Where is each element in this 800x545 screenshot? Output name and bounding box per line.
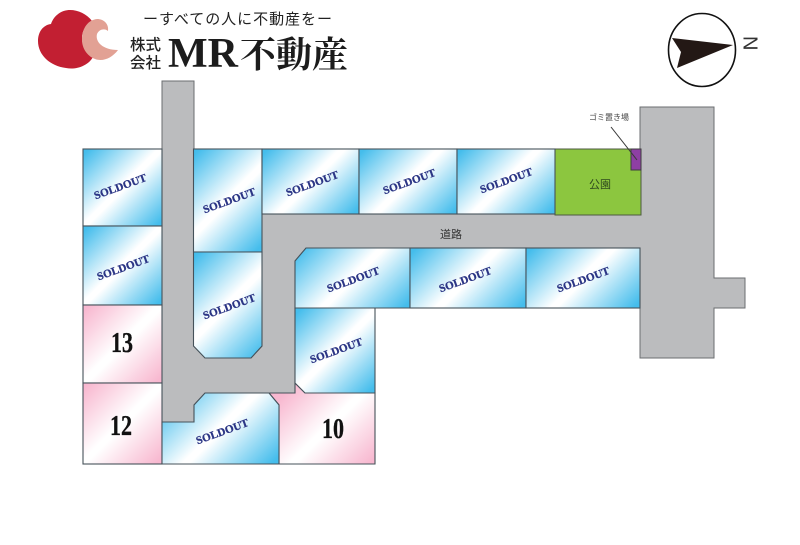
- lot: sold out, left column second: SOLDOUT: [96, 253, 152, 283]
- lot: sold out, middle row second: SOLDOUT: [438, 265, 494, 295]
- lot 12: [83, 383, 162, 464]
- lot 12: 12: [110, 411, 132, 442]
- lot: sold out, left column top: SOLDOUT: [93, 172, 149, 202]
- logo: company type: 株式: [130, 36, 162, 54]
- compass: [668, 14, 760, 86]
- lot: sold out, middle row first: SOLDOUT: [326, 265, 382, 295]
- lot: sold out, top row second: SOLDOUT: [382, 167, 438, 197]
- lot 10: 10: [322, 414, 344, 445]
- lot: sold out, tall lot beside road: [194, 149, 262, 252]
- lot: sold out, chamfered lot: SOLDOUT: [202, 292, 258, 322]
- road: [162, 81, 745, 422]
- lot: sold out, left column second: [83, 226, 162, 305]
- company logo: [38, 10, 348, 77]
- road label: 道路: [440, 227, 462, 241]
- lot: sold out, tall lot beside road: SOLDOUT: [202, 186, 258, 216]
- logo: company type: 会社: [130, 54, 162, 72]
- garbage leader line: [611, 127, 637, 160]
- lot: sold out, top row third: [457, 149, 555, 214]
- garbage area: [589, 112, 641, 170]
- lot: sold out, top row third: SOLDOUT: [479, 166, 535, 196]
- logo: company name: 不動産: [240, 35, 348, 75]
- lot: sold out, middle row first: [295, 248, 410, 308]
- lot: sold out, middle row third: [526, 248, 640, 308]
- lot: sold out, bottom: SOLDOUT: [195, 417, 251, 447]
- park label: 公園: [589, 178, 611, 191]
- lot: sold out, middle row second: [410, 248, 526, 308]
- lot 13: 13: [111, 328, 133, 359]
- logo: company type: [130, 36, 162, 72]
- lot: sold out, left column top: [83, 149, 162, 226]
- logo mark: red cloud: [38, 10, 93, 69]
- lot 10: [269, 383, 375, 464]
- lot: sold out, middle row third: SOLDOUT: [556, 265, 612, 295]
- garbage label: ゴミ置き場: [589, 112, 629, 122]
- lot: sold out, lower right: [295, 308, 375, 393]
- logo: company name: MR: [168, 31, 239, 77]
- lot: sold out, lower right: SOLDOUT: [309, 336, 365, 366]
- lot: sold out, bottom: [162, 393, 279, 464]
- logo mark: pink swirl: [82, 19, 118, 60]
- lot: sold out, top row second: [359, 149, 457, 214]
- north label: N: [738, 36, 760, 50]
- logo tagline: ーすべての人に不動産をー: [143, 11, 332, 28]
- logo: company name: [168, 31, 348, 77]
- compass arrow: [672, 38, 733, 68]
- lot: sold out, top row first: [262, 149, 359, 214]
- lot: sold out, top row first: SOLDOUT: [285, 169, 341, 199]
- lot: sold out, chamfered lot: [194, 252, 262, 358]
- lot 13: [83, 305, 162, 383]
- park: [555, 149, 641, 215]
